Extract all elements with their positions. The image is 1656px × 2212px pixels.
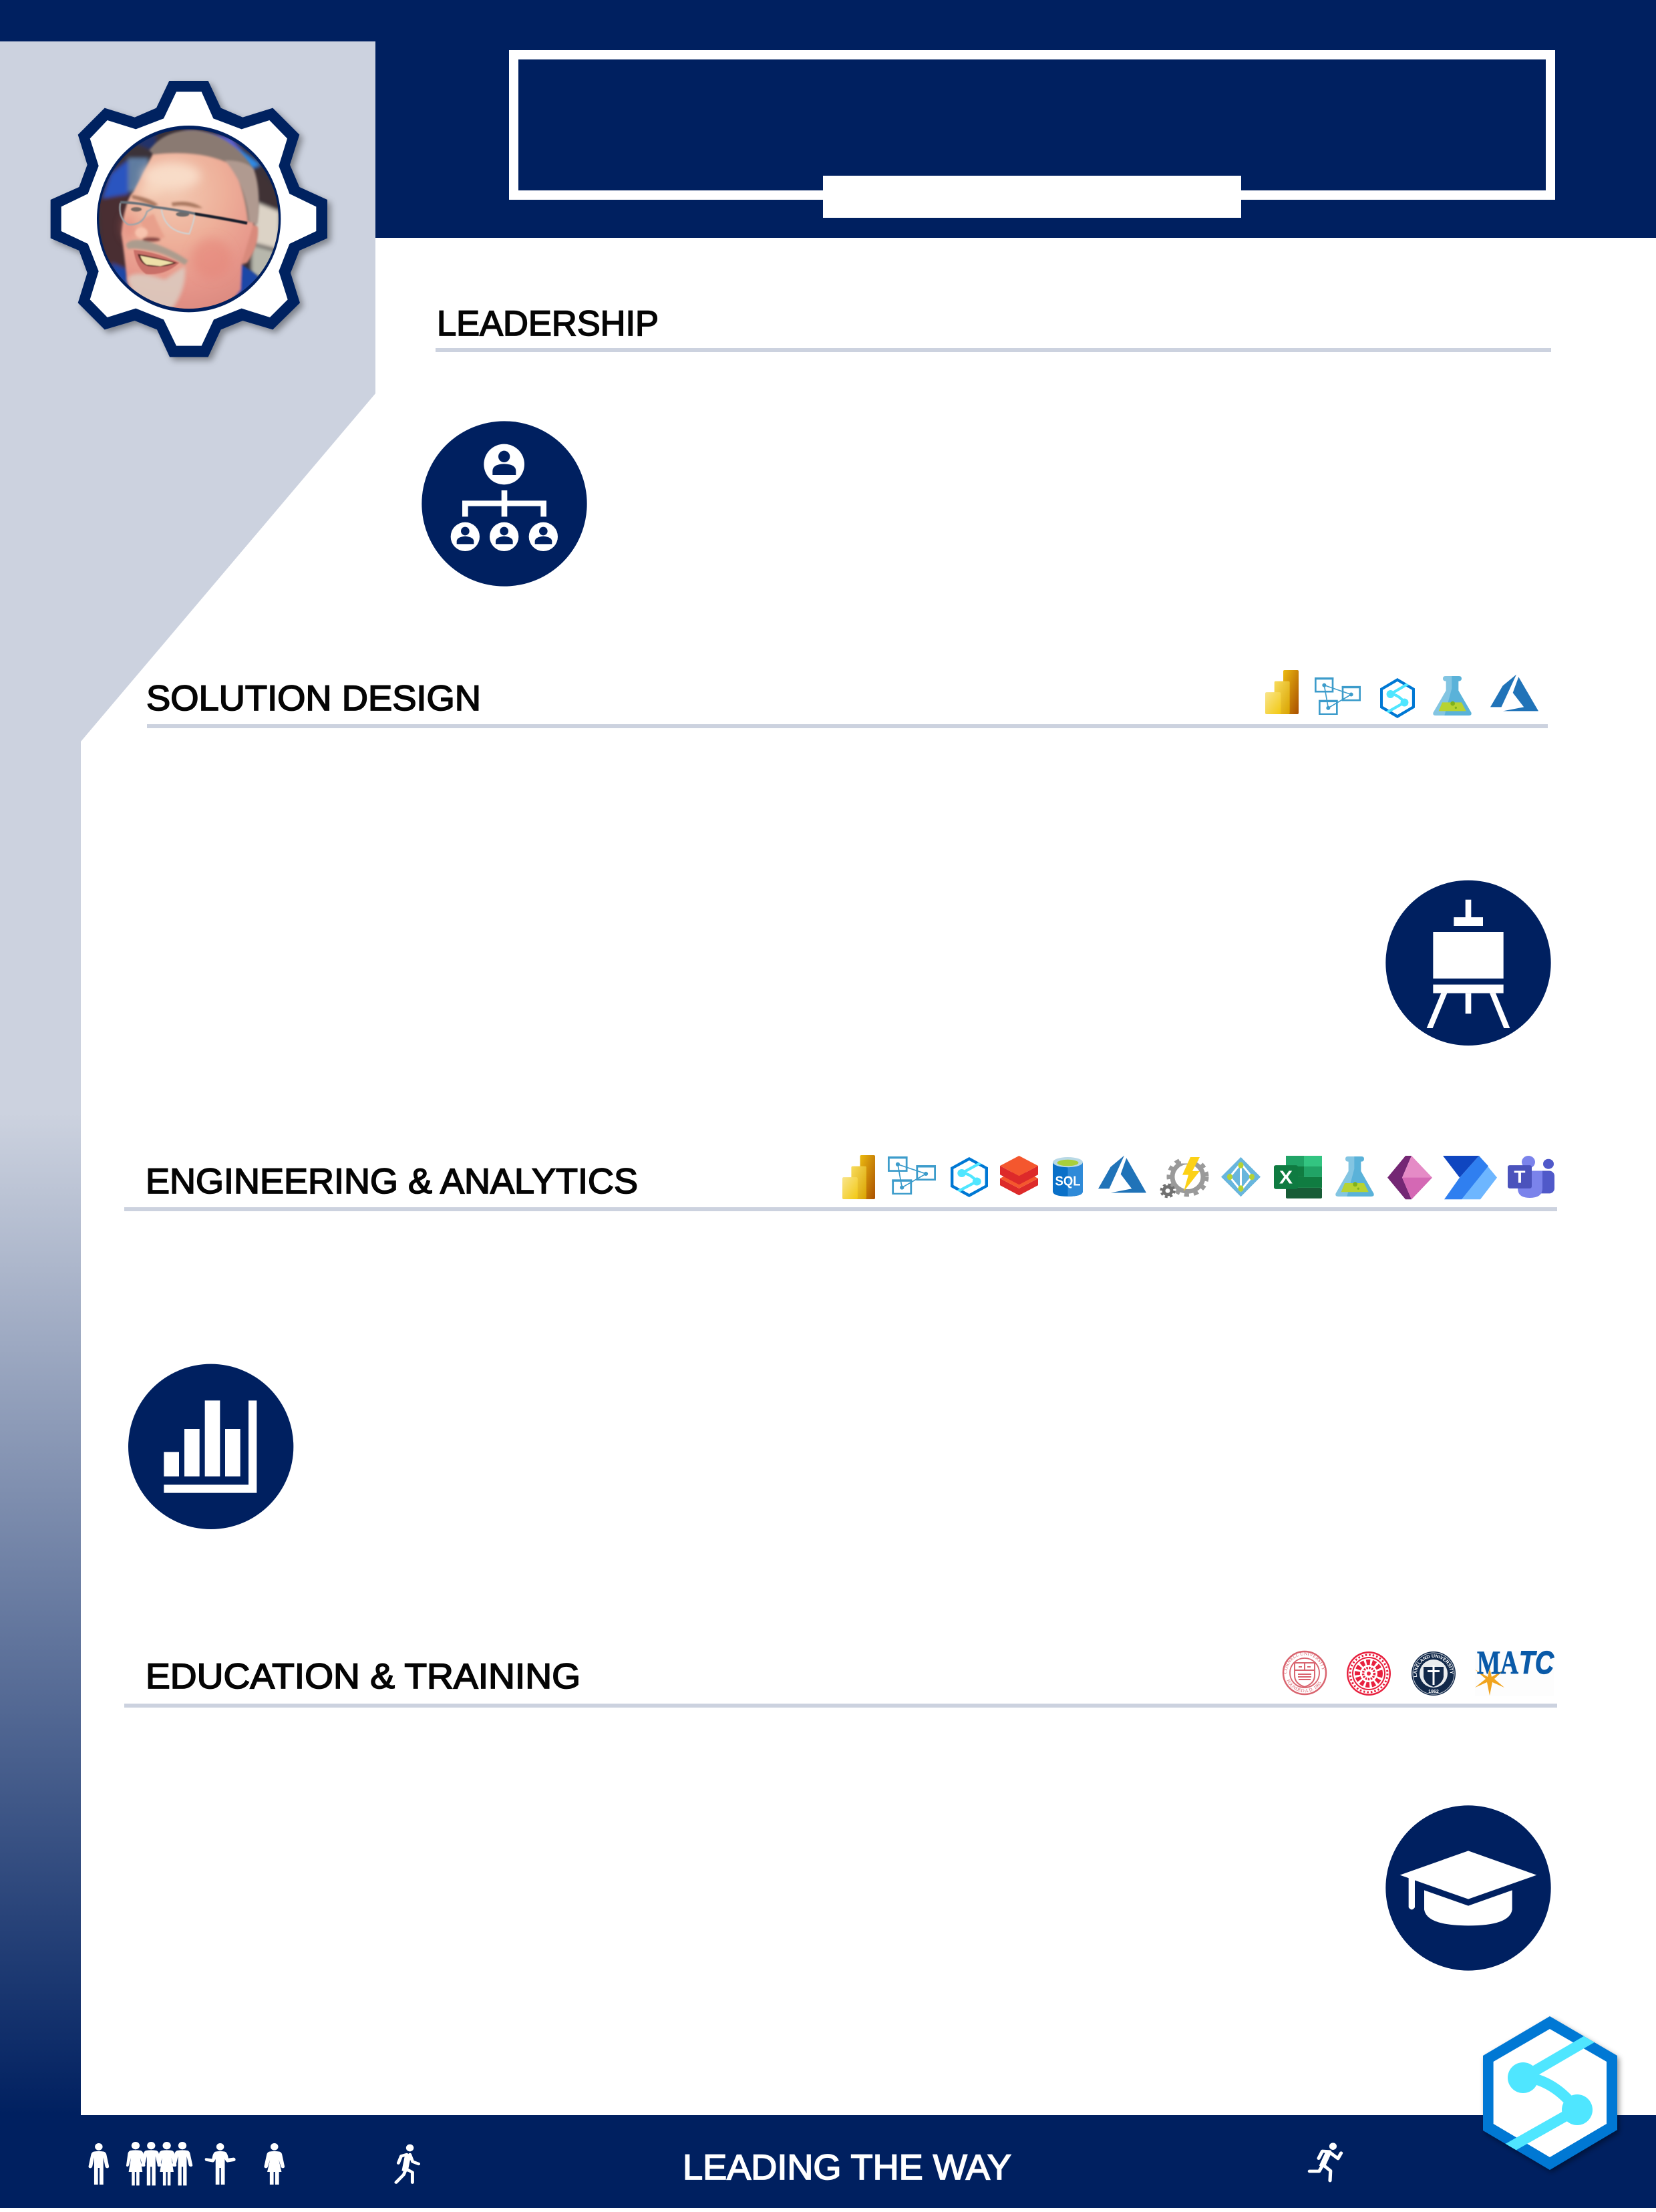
photo ring [97, 126, 281, 312]
icon: sql database [1053, 1157, 1083, 1197]
person: runner [1309, 2143, 1341, 2181]
portrait photo [96, 125, 283, 314]
logo: matc: MA [1477, 1643, 1518, 1681]
icon: excel [1274, 1156, 1322, 1199]
footer people icons [89, 2142, 419, 2185]
icon: power automate [1443, 1156, 1497, 1199]
logo: cornell seal: CORNELL UNIVERSITY [1284, 1652, 1325, 1674]
logo: cornell seal: FOUNDED A.D. 1865 [1287, 1680, 1321, 1693]
icon: teams: T [1514, 1166, 1526, 1187]
heading: leadership: LEADERSHIP [437, 304, 659, 343]
person: presenter [205, 2143, 236, 2185]
rule: engineering [124, 1207, 1557, 1211]
icon: power apps [1387, 1156, 1432, 1199]
logo: large synapse hexagon [1483, 2016, 1617, 2170]
heading: solution design: SOLUTION DESIGN [146, 679, 481, 718]
heading: education and training: EDUCATION & TRAINING [146, 1657, 581, 1696]
left light panel with diagonal [0, 41, 375, 2115]
education logos [1283, 1643, 1554, 1696]
icon: flask [1433, 676, 1472, 716]
rule: education [124, 1704, 1557, 1708]
engineering tool icons [842, 1155, 1554, 1199]
person: walker [396, 2145, 419, 2183]
subtitle tab [823, 176, 1241, 218]
heading: engineering and analytics: ENGINEERING & ANALYTICS [146, 1162, 638, 1201]
person: woman [264, 2143, 285, 2185]
footer band [0, 2115, 1656, 2208]
icon: etl diagram [888, 1156, 936, 1194]
icon: flask [1335, 1156, 1374, 1197]
icon: synapse [951, 1157, 988, 1197]
gear inner [61, 92, 316, 346]
logo: matc [1475, 1643, 1554, 1696]
icon: excel: X [1279, 1167, 1293, 1188]
icon: teams [1508, 1156, 1554, 1198]
icon: azure functions gear [1161, 1156, 1206, 1197]
icon: etl diagram [1315, 677, 1361, 714]
icon: power bi [842, 1155, 875, 1199]
icon: sql database: SQL [1055, 1174, 1080, 1189]
icon: synapse [1380, 678, 1415, 718]
icon: bar chart [128, 1364, 293, 1529]
logo: cornell seal [1283, 1650, 1327, 1696]
logo: lakeland seal [1412, 1651, 1456, 1696]
icon: easel [1385, 881, 1551, 1046]
icon: data catalog diamond [1221, 1157, 1261, 1197]
sidebar gradient [0, 742, 81, 2115]
icon: power bi [1265, 670, 1299, 714]
icon: azure [1098, 1156, 1146, 1193]
icon: azure [1490, 675, 1538, 711]
logo: red rose window seal [1347, 1651, 1391, 1696]
logo: matc: TC [1519, 1645, 1554, 1681]
logo: lakeland seal: LAKELAND UNIVERSITY [1414, 1654, 1454, 1677]
group of people [126, 2142, 192, 2185]
logo: lakeland seal: 1862 [1428, 1690, 1439, 1694]
rule: leadership [436, 348, 1551, 352]
gear outline [51, 81, 327, 357]
rule: solution design [147, 724, 1548, 728]
icon: databricks [1000, 1156, 1038, 1195]
solution design tool icons [1265, 670, 1538, 718]
footer slogan: LEADING THE WAY [683, 2148, 1011, 2187]
title frame [514, 55, 1550, 218]
person: man [89, 2143, 109, 2185]
icon: graduation cap [1385, 1805, 1551, 1971]
header band [0, 0, 1656, 238]
portrait gear [51, 81, 327, 357]
icon: org chart [422, 421, 587, 587]
